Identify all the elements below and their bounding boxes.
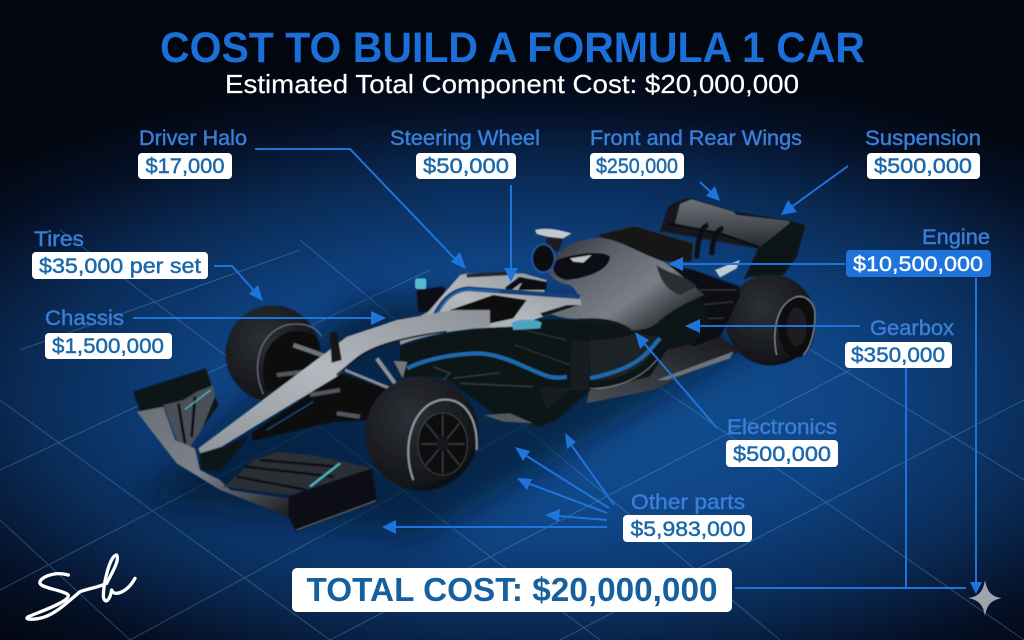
label: gearbox: $350,000	[851, 344, 945, 367]
label: electronics: $500,000	[733, 443, 831, 466]
front half of car	[133, 305, 490, 532]
arrow: chassis	[133, 311, 386, 325]
mirror and left side	[415, 278, 450, 312]
label: driver halo	[138, 127, 247, 179]
label: tires: Tires	[34, 228, 84, 251]
rear half of car	[400, 198, 816, 427]
front wing	[133, 368, 377, 532]
nose and chassis top	[198, 310, 490, 470]
label: tires	[32, 228, 208, 279]
gearbox area	[657, 260, 740, 347]
label: electronics: Electronics	[727, 416, 837, 439]
label: tires: $35,000 per set	[39, 255, 201, 278]
label: chassis: Chassis	[45, 307, 124, 330]
total cost box: TOTAL COST: $20,000,000	[306, 571, 718, 608]
label: engine: $10,500,000	[853, 253, 983, 276]
label: electronics	[726, 416, 838, 467]
illustration: formula 1 car	[133, 198, 816, 532]
label: chassis	[45, 307, 172, 359]
rear wing	[660, 198, 805, 280]
near front wheel	[365, 376, 478, 490]
underside of nose	[252, 345, 407, 441]
label: steering wheel: $50,000	[423, 155, 509, 178]
main dark bodywork	[400, 297, 710, 427]
arrow: steering wheel	[504, 185, 518, 282]
livery swoosh	[407, 338, 660, 388]
label: front and rear wings	[590, 127, 802, 179]
label: other parts: $5,983,000	[630, 518, 746, 541]
label: steering wheel	[390, 127, 540, 179]
far front wheel	[226, 305, 322, 401]
signature logo	[27, 555, 135, 619]
label: engine	[846, 226, 991, 277]
arrow: engine	[668, 257, 845, 271]
title: COST TO BUILD A FORMULA 1 CAR	[160, 24, 865, 72]
arrow: driver halo	[255, 149, 466, 269]
sidepod	[433, 328, 657, 423]
sparkle icon	[968, 580, 1002, 616]
label: driver halo: $17,000	[146, 155, 224, 178]
subtitle: Estimated Total Component Cost: $20,000,000	[225, 69, 799, 99]
label: suspension: $500,000	[874, 155, 972, 178]
label: other parts: Other parts	[631, 491, 745, 514]
label: suspension: Suspension	[865, 127, 981, 150]
engine cover	[543, 238, 705, 330]
arrow: gearbox	[685, 319, 860, 333]
label: chassis: $1,500,000	[52, 335, 164, 358]
engine cover fin	[597, 226, 693, 262]
arrows: other parts	[382, 433, 614, 534]
rear floor	[587, 337, 742, 403]
arrow: wings	[700, 182, 720, 201]
label: engine: Engine	[922, 226, 990, 249]
arrow: electronics	[635, 332, 717, 428]
label: suspension	[865, 127, 981, 179]
label: driver halo: Driver Halo	[139, 127, 247, 150]
label: steering wheel: Steering Wheel	[390, 127, 540, 150]
label: front and rear wings: $250,000	[596, 155, 678, 178]
label: gearbox	[845, 317, 955, 368]
connector lines to total	[735, 278, 982, 594]
arrow: suspension	[781, 166, 848, 215]
label: front and rear wings: Front and Rear Wings	[590, 127, 802, 150]
arrow: tires	[214, 266, 263, 301]
rear wheel	[726, 275, 816, 365]
airbox	[532, 229, 572, 272]
label: gearbox: Gearbox	[870, 317, 955, 340]
cockpit	[400, 273, 582, 345]
label: other parts	[623, 491, 752, 542]
